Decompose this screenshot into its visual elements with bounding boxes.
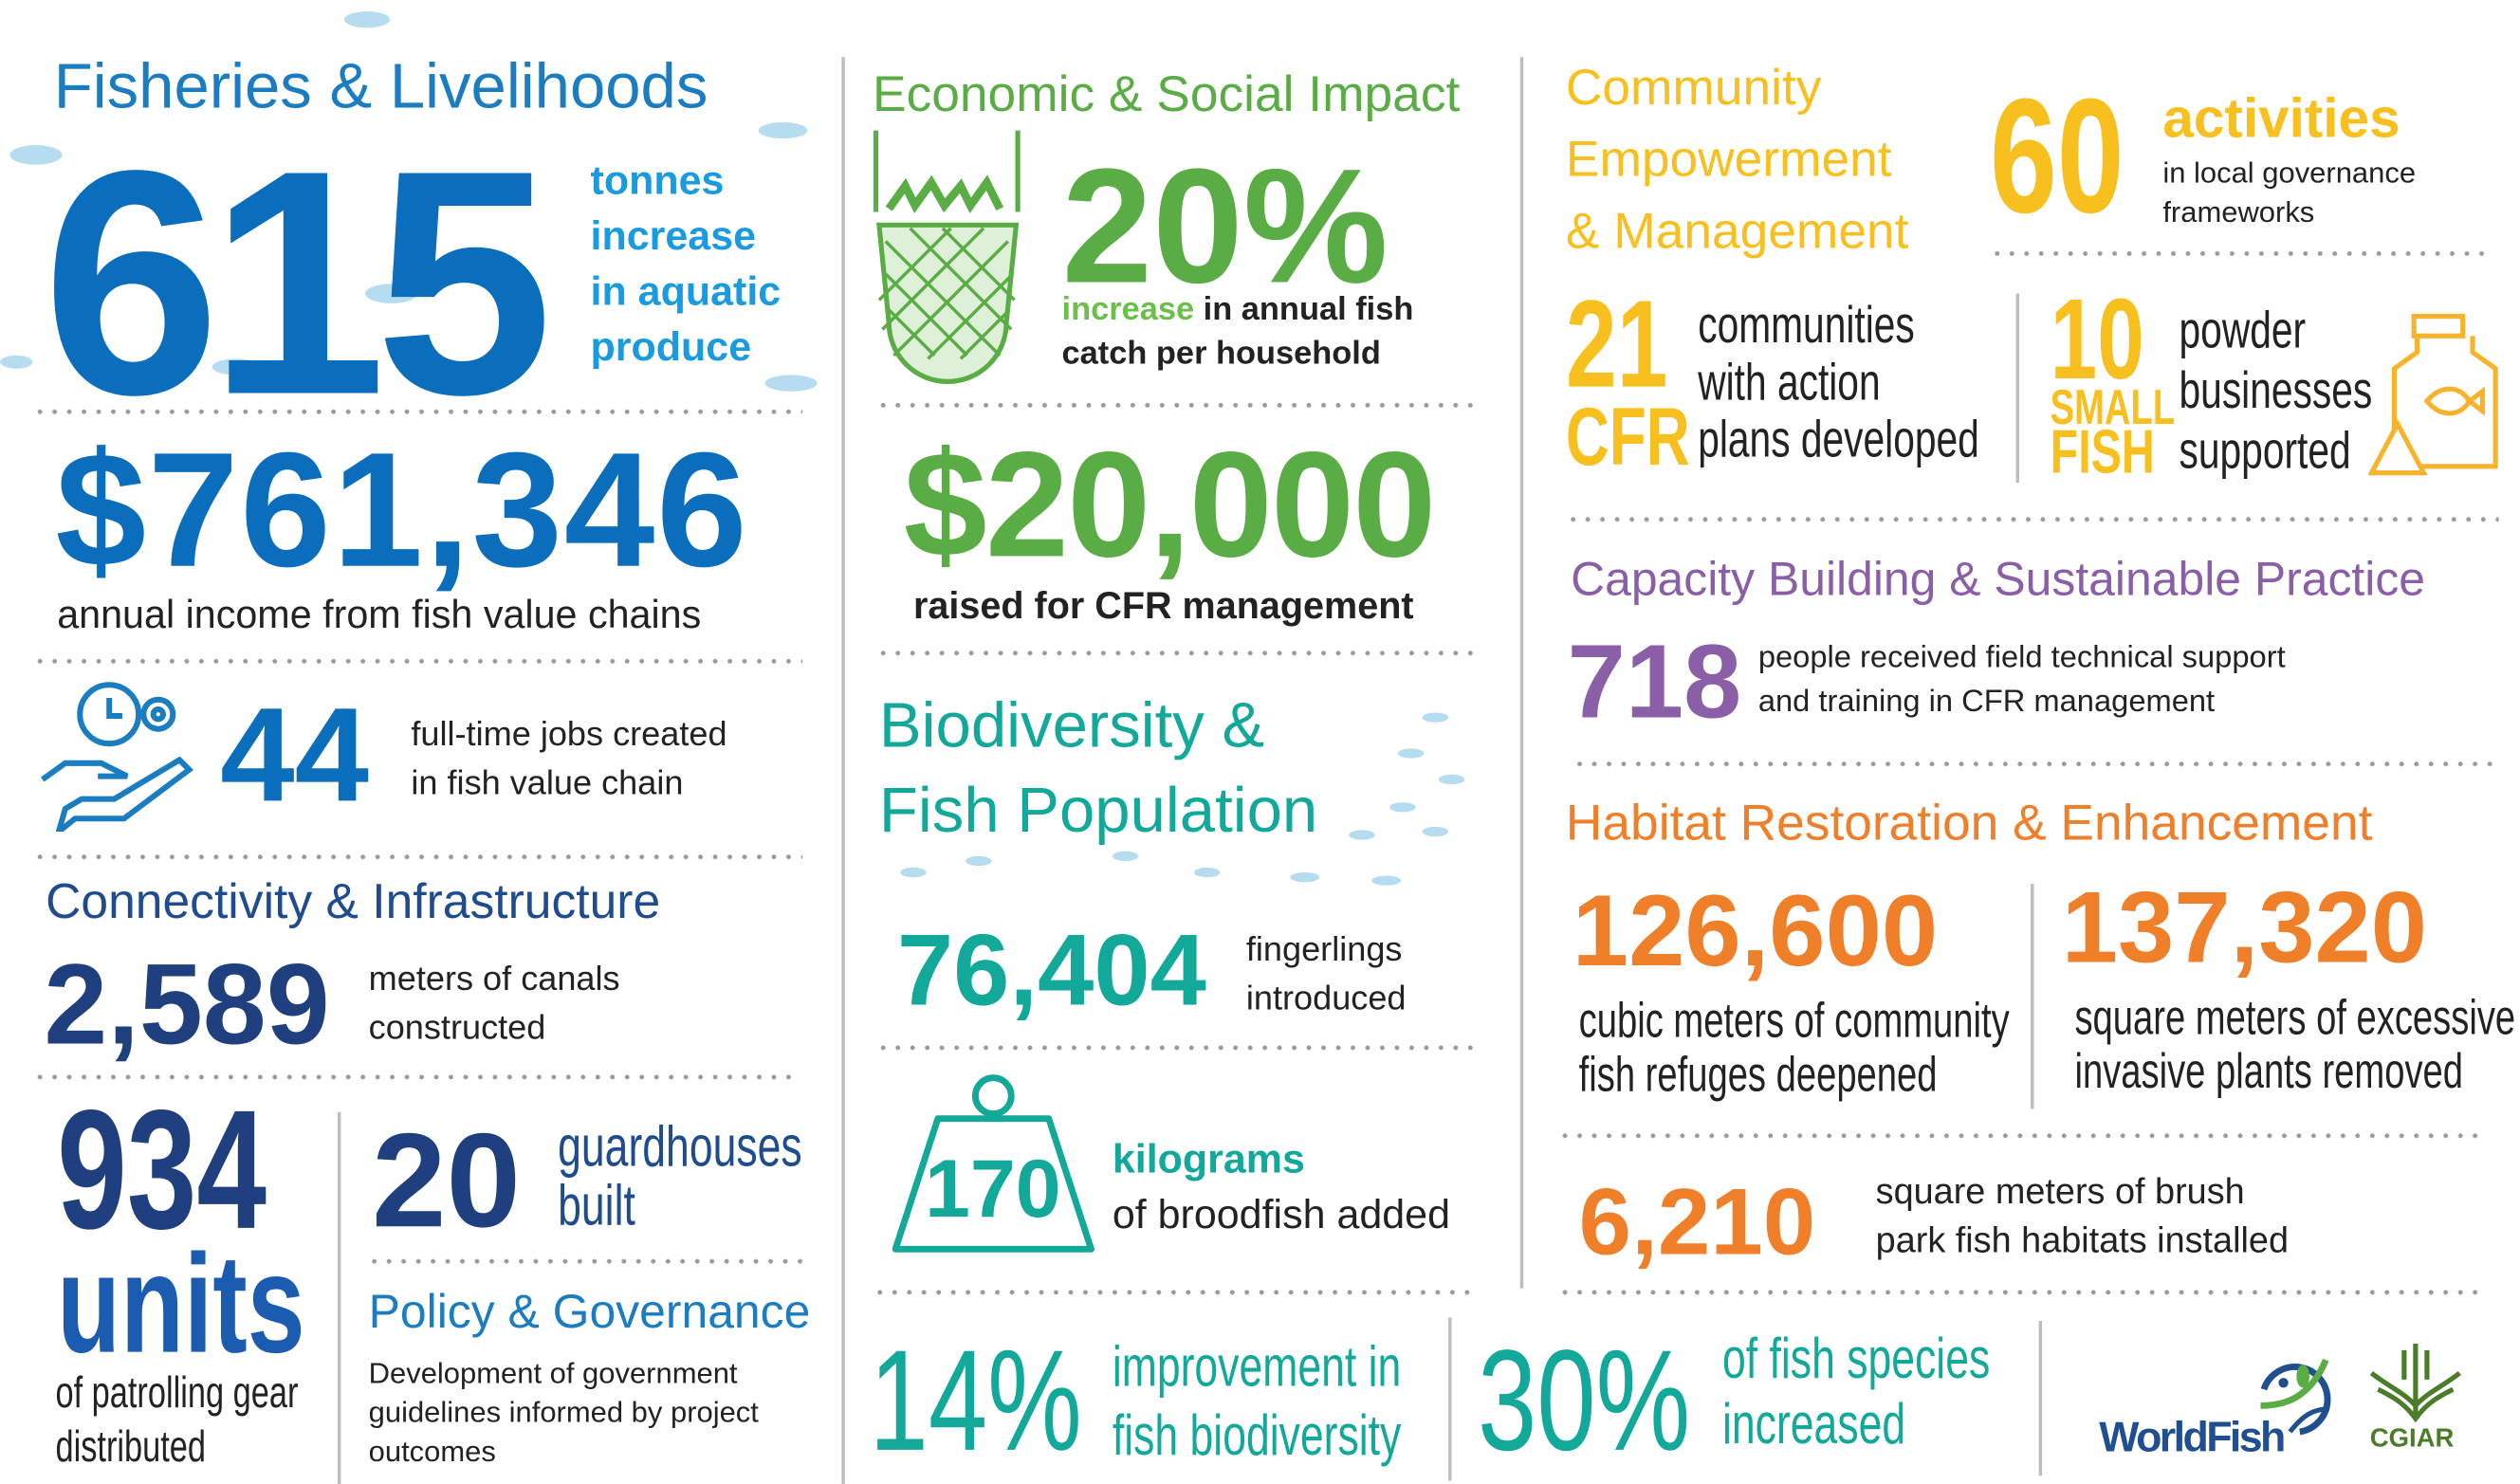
label: jobs: full-time jobs created <box>411 716 727 754</box>
panel: community <box>1566 59 2498 487</box>
label: jobs: in fish value chain <box>411 765 683 802</box>
text: policy <box>369 1357 759 1468</box>
label: catch: increase in annual fish <box>1062 292 1413 328</box>
label: tonnes: increase <box>591 213 756 259</box>
label: training: people received field technical support <box>1758 641 2286 675</box>
stat: 10 small fish <box>2051 276 2175 487</box>
label: tonnes: tonnes <box>591 158 724 204</box>
heading: biodiversity <box>879 691 1317 847</box>
text: policy: Development of government <box>369 1357 738 1389</box>
icon: weight 170 <box>892 1074 1094 1253</box>
label: catch <box>1062 292 1413 372</box>
logo: cgiar: CGIAR <box>2370 1425 2454 1453</box>
label: activities: in local governance <box>2162 156 2416 189</box>
icon: jar <box>2368 314 2498 476</box>
label: communities <box>1698 295 1979 468</box>
label: biodiversity improvement: fish biodiversity <box>1113 1404 1401 1468</box>
label: activities: activities <box>2162 88 2400 150</box>
heading: community: Community <box>1566 59 1822 116</box>
label: activities: frameworks <box>2162 195 2314 229</box>
label: brush park <box>1876 1171 2289 1260</box>
stat: 21 CFR <box>1566 276 1690 483</box>
label: plants <box>2074 992 2515 1099</box>
text: policy: guidelines informed by project <box>369 1396 759 1428</box>
logo: worldfish <box>2099 1358 2331 1461</box>
label: biodiversity improvement: improvement in <box>1113 1335 1401 1400</box>
label: communities: with action <box>1698 352 1881 411</box>
heading: community: Empowerment <box>1566 131 1892 188</box>
stat: 2,589: 2,589 <box>44 941 330 1068</box>
stat: 21 CFR: 21 <box>1566 276 1668 414</box>
stat: $20,000: $20,000 <box>904 422 1435 589</box>
label: training: and training in CFR management <box>1758 685 2215 719</box>
label: jobs <box>411 716 727 802</box>
label: tonnes <box>591 158 781 370</box>
label: species: of fish species <box>1722 1328 1990 1391</box>
stat: 21 CFR: CFR <box>1566 392 1690 483</box>
stat: 60: 60 <box>1990 65 2125 247</box>
label: tonnes: in aquatic <box>591 269 781 315</box>
label: refuges <box>1579 995 2010 1103</box>
stat: 20%: 20% <box>1062 136 1389 318</box>
label: canals <box>369 961 620 1047</box>
heading: connectivity: Connectivity & Infrastructure <box>46 875 660 929</box>
label: raised: raised for CFR management <box>913 584 1414 626</box>
label: activities <box>2162 88 2416 229</box>
heading: biodiversity: Biodiversity & <box>879 691 1264 761</box>
heading: policy: Policy & Governance <box>369 1287 810 1339</box>
label: businesses: businesses <box>2180 360 2372 419</box>
stat: 934 units: 934 <box>57 1076 267 1265</box>
stat: income: $761,346 <box>55 419 749 602</box>
label: refuges: fish refuges deepened <box>1579 1049 1938 1103</box>
label: communities: plans developed <box>1698 410 1979 468</box>
label: communities: communities <box>1698 295 1915 354</box>
label: brush park: square meters of brush <box>1876 1171 2245 1212</box>
label: canals: meters of canals <box>369 961 620 998</box>
panel: fisheries & livelihoods <box>37 52 810 1484</box>
stat: 10 small fish: FISH <box>2051 419 2155 487</box>
panel: economic & biodiversity <box>870 65 1483 1481</box>
stat: 20: 20 <box>372 1108 521 1255</box>
panel: habitat <box>1562 794 2515 1275</box>
text: policy: outcomes <box>369 1435 496 1468</box>
stat: 76,404: 76,404 <box>897 915 1206 1027</box>
label: plants: square meters of excessive <box>2074 992 2515 1045</box>
label: guardhouses: guardhouses <box>558 1115 802 1179</box>
heading: economic: Economic & Social Impact <box>873 65 1460 122</box>
stat: 14%: 14% <box>870 1319 1082 1480</box>
panel: fisheries & livelihoods: units <box>57 1226 305 1383</box>
icon: fish basket <box>873 131 1021 384</box>
label: fingerlings <box>1246 931 1407 1017</box>
label: patrolling: of patrolling gear <box>55 1368 298 1417</box>
heading: biodiversity: Fish Population <box>879 777 1317 847</box>
stat: 10 small fish: SMALL <box>2051 381 2175 435</box>
label: species <box>1722 1328 1990 1457</box>
icon: weight 170: 170 <box>925 1144 1061 1235</box>
heading: habitat: Habitat Restoration & Enhancement <box>1566 794 2372 852</box>
stat: 137,320: 137,320 <box>2062 872 2427 985</box>
label: businesses: supported <box>2180 421 2351 480</box>
stat: 30%: 30% <box>1478 1319 1690 1480</box>
label: income: annual income from fish value chains <box>57 594 701 637</box>
label: guardhouses <box>558 1115 802 1237</box>
stat: 126,600: 126,600 <box>1573 875 1938 988</box>
label: patrolling: distributed <box>55 1422 206 1471</box>
label: brush park: park fish habitats installed <box>1876 1219 2289 1260</box>
label: businesses: powder <box>2180 300 2306 358</box>
label: fingerlings: introduced <box>1246 980 1407 1017</box>
stat: 6,210: 6,210 <box>1579 1169 1815 1275</box>
logo: worldfish: WorldFish <box>2099 1412 2284 1461</box>
stat: 615: 615 <box>43 104 542 462</box>
stat: 718: 718 <box>1568 623 1741 741</box>
label: catch: catch per household <box>1062 336 1381 372</box>
icon: hand clock <box>41 682 193 832</box>
heading: capacity: Capacity Building & Sustainable Practice <box>1571 555 2425 607</box>
label: training <box>1758 641 2286 719</box>
label: broodfish <box>1113 1137 1450 1237</box>
label: broodfish: of broodfish added <box>1113 1192 1450 1237</box>
label: plants: invasive plants removed <box>2074 1045 2463 1099</box>
heading: fisheries: Fisheries & Livelihoods <box>54 52 708 122</box>
label: broodfish: kilograms <box>1113 1137 1305 1182</box>
heading: community <box>1566 59 1908 259</box>
label: species: increased <box>1722 1393 1905 1457</box>
logo: cgiar <box>2369 1344 2461 1453</box>
label: businesses <box>2180 300 2372 480</box>
label: biodiversity improvement <box>1113 1335 1402 1468</box>
label: guardhouses: built <box>558 1174 635 1237</box>
label: fingerlings: fingerlings <box>1246 931 1402 969</box>
stat: 44: 44 <box>220 682 369 830</box>
label: refuges: cubic meters of community <box>1579 995 2010 1049</box>
label: canals: constructed <box>369 1009 545 1047</box>
stat: 10 small fish: 10 <box>2051 276 2144 403</box>
heading: community: & Management <box>1566 202 1908 259</box>
label: patrolling <box>55 1368 298 1471</box>
label: tonnes: produce <box>591 324 751 370</box>
